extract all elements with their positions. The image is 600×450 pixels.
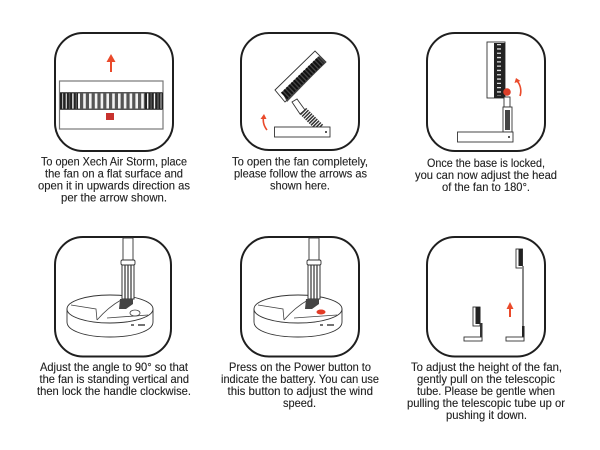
panel: step 2 (241, 33, 359, 150)
text: step 5 caption: Press on the Power button to (229, 361, 371, 374)
text: step 1 caption: the fan on a flat surface and (45, 168, 183, 180)
text: step 2 caption: please follow the arrows as (234, 168, 367, 180)
icon: fan at low height (464, 307, 482, 341)
icon: base with red power button (254, 238, 342, 337)
arrow: up (106, 54, 116, 72)
icon: base with handle (67, 238, 153, 337)
arrow: up (506, 302, 514, 317)
text: step 2 caption: shown here. (270, 180, 330, 192)
text: step 1 caption: per the arrow shown. (61, 192, 167, 204)
panel: step 1 (55, 33, 173, 151)
text: step 4 caption: Adjust the angle to 90° so that (40, 361, 189, 374)
text: step 3 caption: Once the base is locked, (427, 157, 545, 170)
text: step 3 caption: of the fan to 180°. (442, 181, 530, 194)
text: step 4 caption: the fan is standing vertical and (40, 373, 189, 386)
text: step 3 caption: you can now adjust the head (415, 169, 557, 182)
icon: closed fan front view (60, 81, 163, 129)
panel: step 5 (241, 237, 359, 356)
text: step 2 caption (232, 156, 368, 192)
icon: fan at full height (506, 249, 524, 341)
text: step 6 caption: gently pull on the telescopic (417, 373, 555, 386)
icon: fan with head raised (458, 42, 513, 142)
text: step 5 caption: this button to adjust the wind (228, 385, 373, 398)
text: step 6 caption (407, 361, 565, 422)
text: step 6 caption: pulling the telescopic tube up or (407, 397, 565, 410)
text: step 1 caption (38, 156, 190, 204)
panel: step 3 (427, 33, 545, 151)
text: step 6 caption: To adjust the height of the fan, (411, 361, 562, 374)
arrow: curved up (260, 114, 267, 130)
arrow: curved up (514, 78, 521, 96)
text: step 5 caption: speed. (283, 397, 316, 410)
panel: step 4 (55, 237, 171, 356)
text: step 1 caption: open it in upwards direction as (38, 180, 190, 192)
text: step 6 caption: tube. Please be gentle when (417, 385, 555, 398)
text: step 1 caption: To open Xech Air Storm, place (41, 156, 187, 168)
text: step 4 caption: then lock the handle clockwise. (37, 385, 191, 398)
text: step 5 caption (221, 361, 379, 410)
icon: half-open fan (274, 51, 330, 137)
text: step 6 caption: pushing it down. (446, 409, 527, 422)
text: step 3 caption (415, 157, 557, 194)
text: step 2 caption: To open the fan completely, (232, 156, 368, 168)
text: step 4 caption (37, 361, 191, 398)
text: step 5 caption: indicate the battery. You can use (221, 373, 379, 386)
panel: step 6 (427, 237, 545, 356)
